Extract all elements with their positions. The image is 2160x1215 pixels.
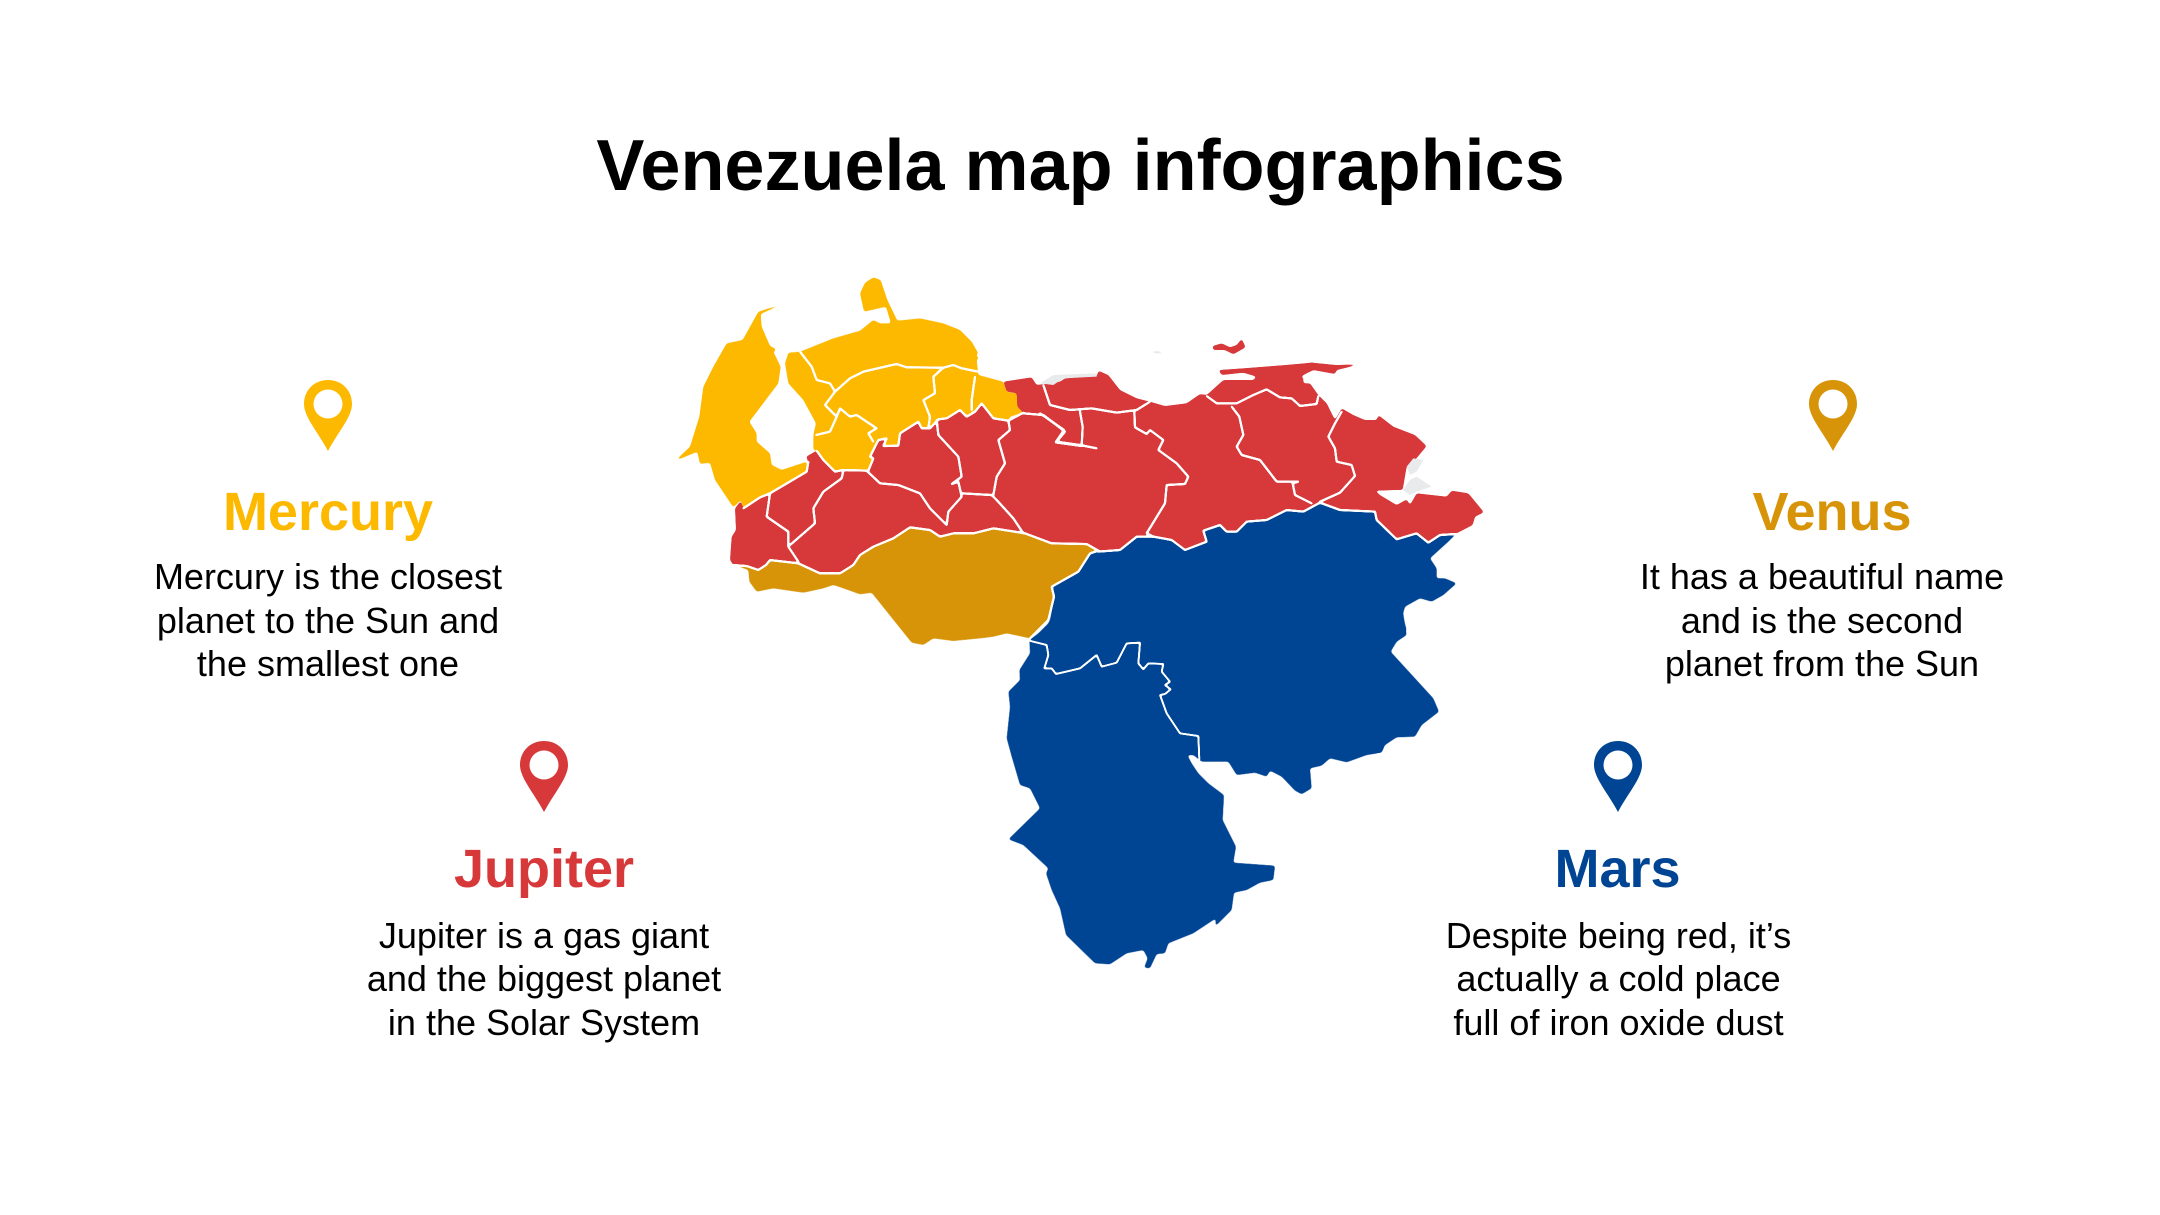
text: Venus description: planet from the Sun <box>1665 643 1979 684</box>
text: Venus description: and is the second <box>1681 600 1963 640</box>
map region: yellow states <box>675 277 1023 508</box>
map region: red states <box>730 339 1484 573</box>
panel: Venus <box>1406 380 2004 684</box>
text: Jupiter description: in the Solar System <box>388 1002 700 1042</box>
icon: Mars pin <box>1594 741 1642 812</box>
heading: Venus: Venus <box>1752 482 1912 542</box>
heading: Jupiter: Jupiter <box>454 838 634 898</box>
text: Jupiter description <box>367 741 721 1042</box>
panel: Mars <box>1446 741 1791 1042</box>
icon: Mercury pin <box>304 380 352 451</box>
text: Mercury description: the smallest one <box>197 643 459 684</box>
heading: Mercury: Mercury <box>223 482 433 542</box>
title: Venezuela map infographics <box>596 126 1565 206</box>
icon: Jupiter pin <box>520 741 568 812</box>
map region: ochre states <box>733 527 1098 645</box>
text: Mars description <box>1446 914 1791 1042</box>
text: Jupiter description: and the biggest planet <box>367 958 721 999</box>
panel: Jupiter <box>367 741 721 1042</box>
text: Venus description <box>1640 556 2004 684</box>
map detail: grey islands <box>767 351 1432 565</box>
icon: Venus pin <box>1809 380 1857 451</box>
text: Mars description: Despite being red, it’s <box>1446 914 1791 956</box>
text: Jupiter description: Jupiter is a gas giant <box>379 914 709 956</box>
text: Venus description: It has a beautiful name <box>1640 556 2004 597</box>
text: Mercury description: planet to the Sun and <box>157 600 499 640</box>
heading: Mars: Mars <box>1554 838 1681 898</box>
text: Mars description: full of iron oxide dust <box>1453 1002 1784 1042</box>
text: Mercury description: Mercury is the closest <box>154 556 502 597</box>
map region: blue states <box>1007 503 1457 968</box>
text: Mars description: actually a cold place <box>1456 958 1781 999</box>
panel: Mercury <box>154 380 502 684</box>
text: Mercury description <box>154 556 502 684</box>
map borders <box>733 352 1456 760</box>
